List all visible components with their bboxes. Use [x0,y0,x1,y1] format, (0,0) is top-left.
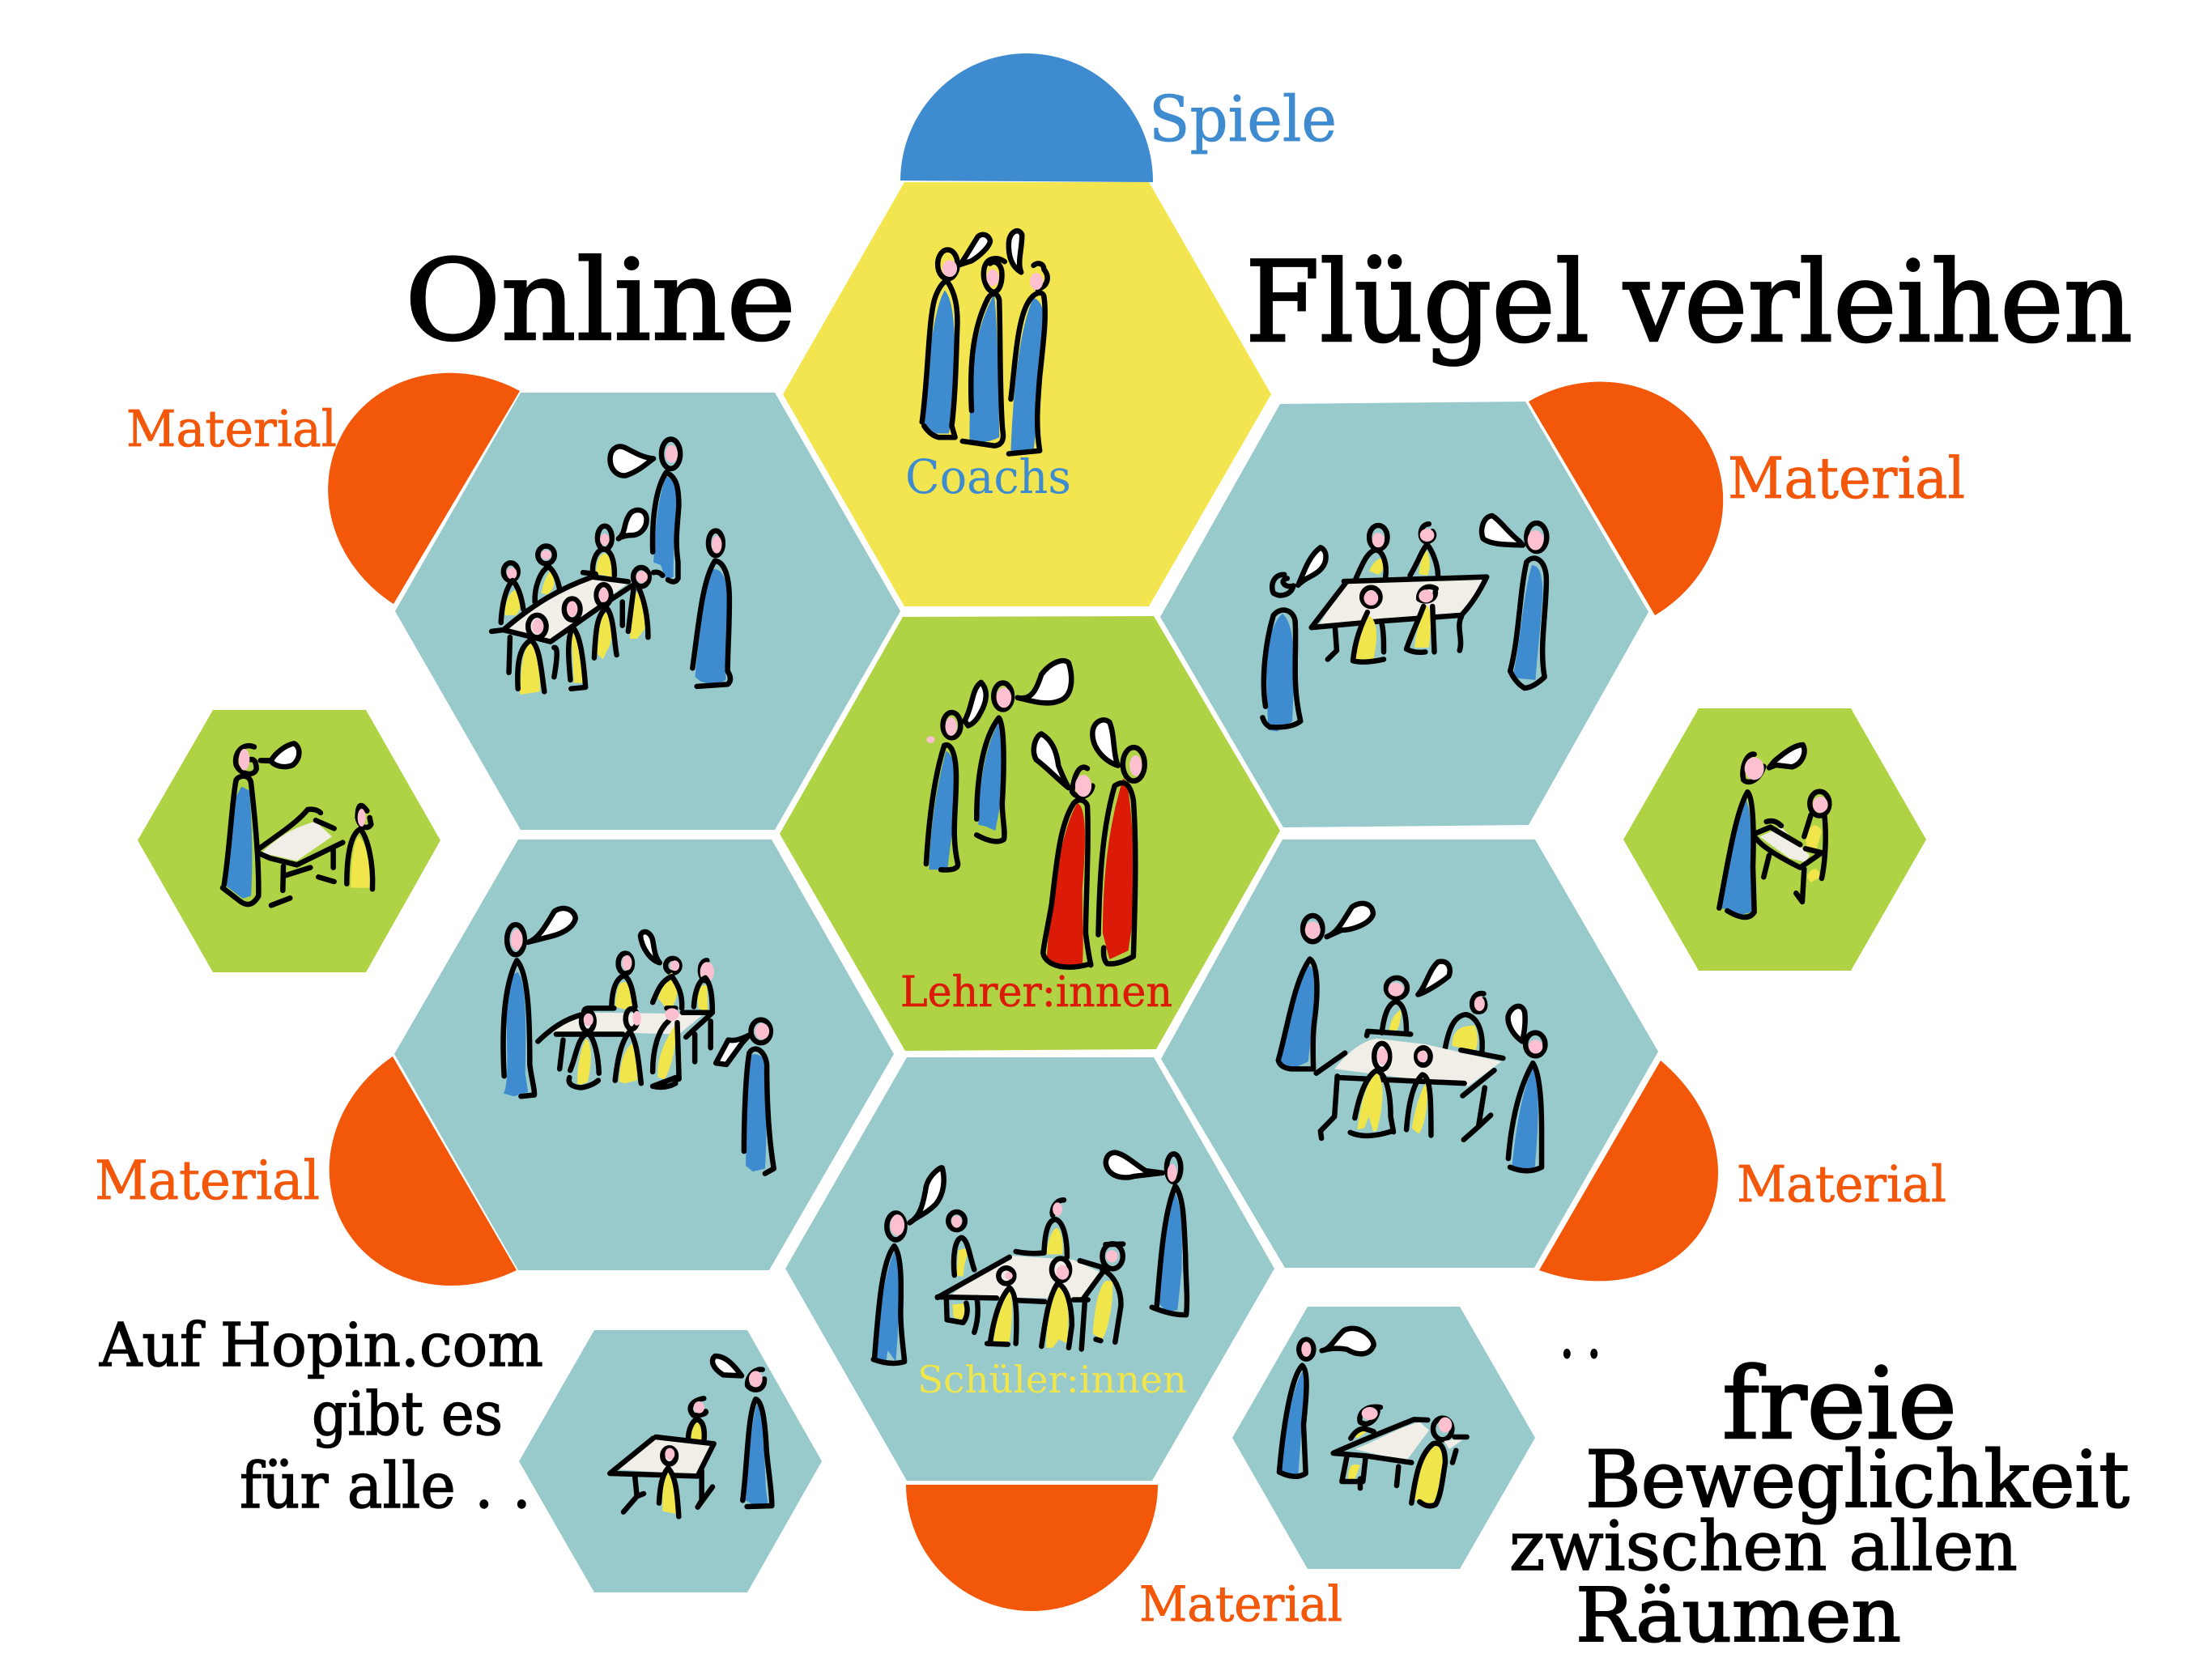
drawing: teachers with four students [1262,516,1546,731]
label: Material mid left: Material [95,1150,320,1212]
panel: teal hexagon mid right [1161,840,1658,1268]
semicircle: material mid left [330,1056,517,1286]
text block: Auf Hopin.com gibt es für alle: gibt es [312,1380,503,1449]
text block: freie Beweglichkeit zwischen allen Räumen: Beweglichkeit [1585,1435,2129,1525]
text block: freie Beweglichkeit zwischen allen Räumen: freie [1722,1346,1957,1461]
text block: freie Beweglichkeit zwischen allen Räumen: zwischen allen [1509,1507,2018,1586]
panel: teal hexagon bottom center [785,1057,1274,1481]
panel: teal hexagon upper left [395,393,900,830]
semicircle: material top right [1529,382,1723,615]
text block: Auf Hopin.com gibt es für alle [99,1311,543,1523]
label: Coachs: Coachs [905,449,1071,504]
panel: teal hexagon upper right [1160,402,1648,827]
panel: small green hexagon left [138,710,440,972]
drawing: three coaches [921,231,1048,454]
panel: teal hexagon mid left [394,840,894,1270]
drawing: teacher and two students, bottom left [610,1356,772,1516]
label: Material mid right: Material [1737,1154,1946,1214]
text block: freie Beweglichkeit zwischen allen Räumen [1509,1302,2129,1658]
label: Material bottom: Material [1139,1576,1342,1633]
semicircle: material bottom [906,1485,1158,1611]
drawing: teachers with students at long table [491,440,730,695]
drawing: teachers with students at round table [504,908,774,1174]
panel: small teal hexagon bottom right [1232,1307,1535,1569]
panel: coaches hexagon [783,182,1271,606]
title: Flügel verleihen: Flügel verleihen [1245,237,2133,368]
text block: Auf Hopin.com gibt es für alle: für alle . . [240,1450,531,1523]
text block: freie Beweglichkeit zwischen allen Räumen: Räumen [1576,1572,1901,1658]
label: Lehrer:innen: Lehrer:innen [900,968,1172,1017]
drawing: teachers with students at trapezoid table [874,1153,1187,1363]
semicircle: Spiele [900,53,1153,182]
label: Material top left: Material [126,399,337,458]
panel: green hexagon center [780,616,1280,1051]
drawing: coaches and teachers talking [926,661,1145,969]
text block: Auf Hopin.com gibt es für alle: Auf Hopin.com [99,1311,543,1380]
label: Material top right: Material [1728,445,1965,512]
panel: small green hexagon right [1623,708,1926,971]
drawing: one to one at table, right [1719,745,1829,917]
drawing: teachers with students at wide table [1278,903,1545,1171]
panel: small teal hexagon bottom left [519,1330,822,1592]
label: Schüler:innen: Schüler:innen [917,1358,1187,1401]
drawing: one to one at table, left [223,743,372,905]
semicircle: material top left [328,373,520,604]
semicircle: material mid right [1539,1061,1718,1281]
text block: freie Beweglichkeit zwischen allen Räumen: . . [1560,1302,1601,1371]
drawing: teacher and two students, bottom right [1279,1329,1467,1506]
label: Spiele: Spiele [1149,83,1337,156]
title: Online: Online [405,236,796,366]
